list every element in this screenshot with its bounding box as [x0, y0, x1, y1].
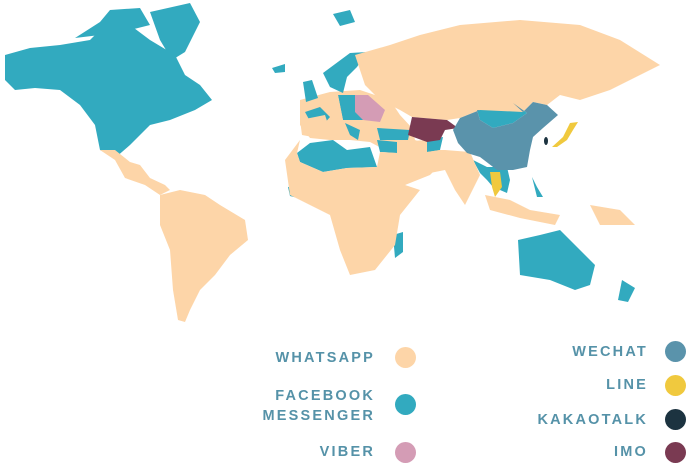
legend: KAKAOTALK: [537, 412, 648, 428]
legend: VIBER: [320, 444, 375, 460]
region: KakaoTalk: [544, 137, 548, 145]
region: WeChat: [453, 102, 558, 170]
legend: imo: [614, 442, 686, 463]
legend: wechat: [572, 341, 686, 362]
legend: kakaotalk: [537, 409, 686, 430]
legend: facebook messenger: [263, 388, 416, 424]
legend: FACEBOOK: [275, 388, 375, 404]
region: WhatsApp: [100, 20, 660, 322]
legend: MESSENGER: [263, 408, 375, 424]
legend: viber: [320, 442, 416, 463]
legend: IMO: [614, 444, 648, 460]
region: Europe and Middle East base (WhatsApp): [300, 90, 445, 185]
legend: line: [606, 375, 686, 396]
legend: whatsapp: [276, 347, 416, 368]
legend: LINE: [606, 377, 648, 393]
legend: WHATSAPP: [276, 350, 375, 366]
region: Viber: [355, 95, 385, 122]
region: IMO: [408, 117, 458, 142]
region: LINE: [490, 122, 578, 197]
world map: [5, 3, 660, 322]
legend: WECHAT: [572, 344, 648, 360]
region: North America (Facebook Messenger): [5, 3, 635, 302]
